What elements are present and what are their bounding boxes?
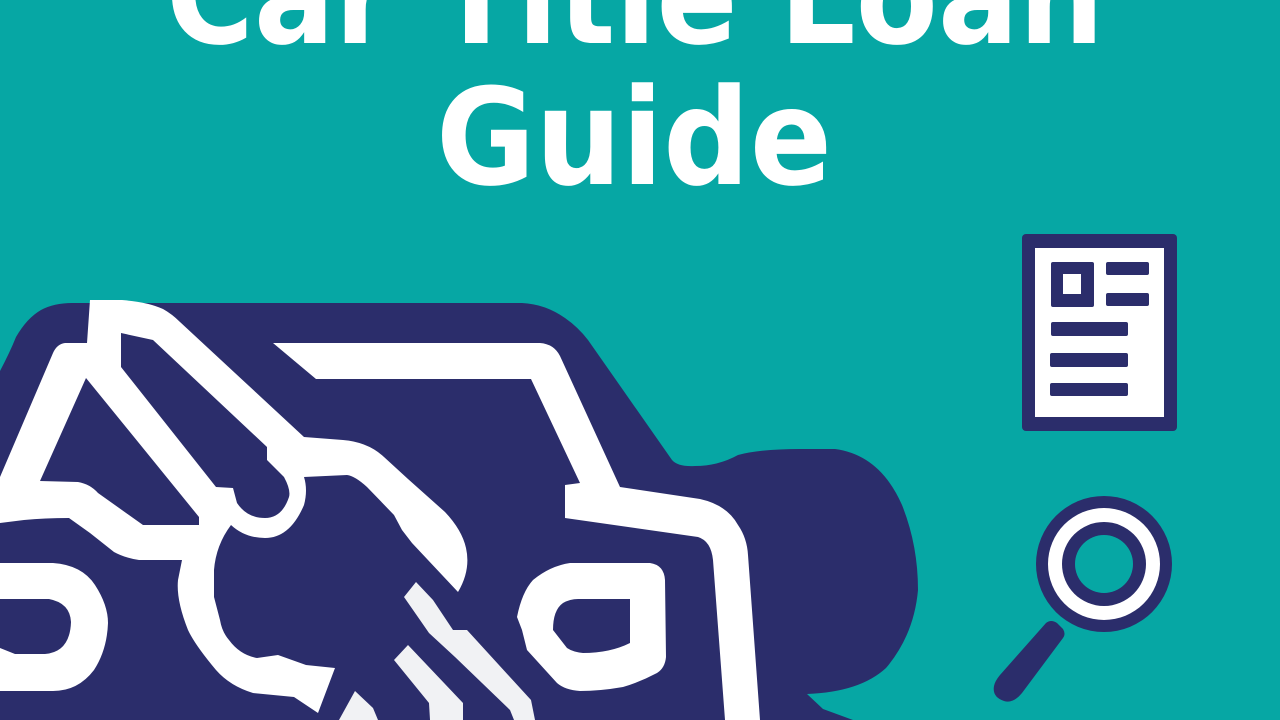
car silhouette — [0, 303, 918, 720]
icon: magnifying glass — [994, 496, 1172, 702]
key teeth — [339, 582, 535, 720]
title — [166, 0, 1104, 216]
car roof and body outline — [273, 343, 760, 720]
title: Guide — [436, 60, 832, 216]
icon: document — [1022, 234, 1177, 431]
left wheel — [0, 563, 108, 691]
right wheel — [517, 563, 666, 691]
windshield and key head outline — [0, 300, 467, 713]
illustration: car and key — [0, 300, 918, 720]
